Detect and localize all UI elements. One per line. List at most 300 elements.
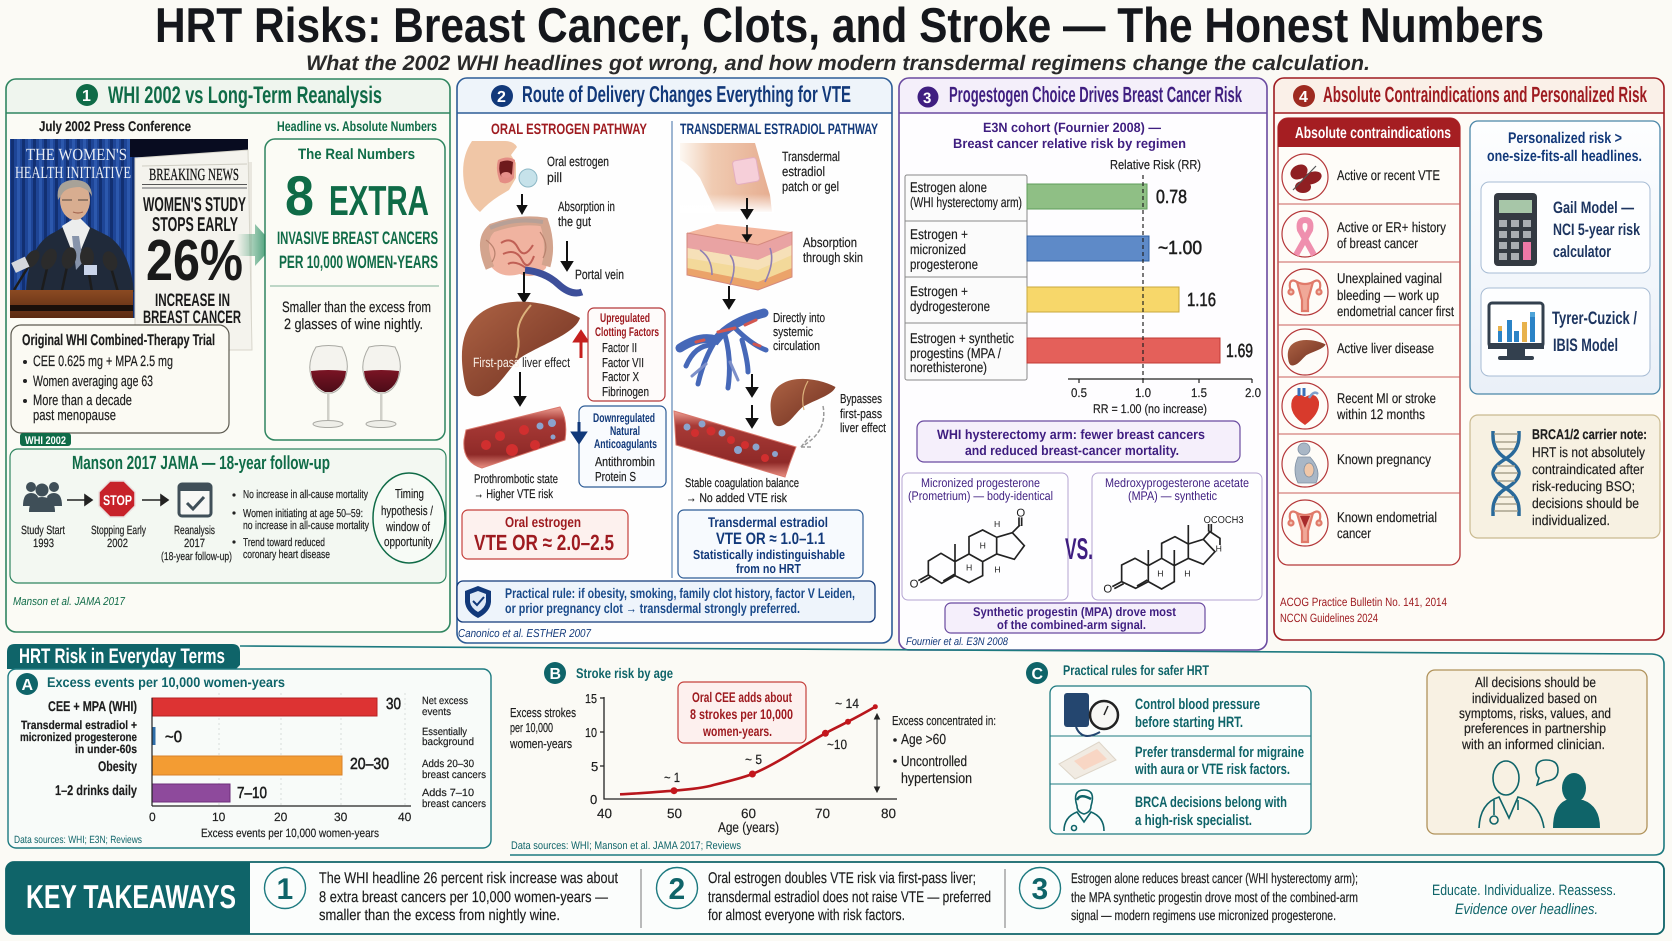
excess concentrated note: Age >60 xyxy=(901,732,946,748)
panel 2: route of delivery: pill xyxy=(547,170,562,185)
panel C heading: C xyxy=(1032,666,1044,683)
Manson 2017 follow-up box: 1993 xyxy=(33,536,54,550)
line chart: 0 xyxy=(590,792,597,807)
line chart: 60 xyxy=(741,806,756,821)
icon: clot xyxy=(1288,161,1323,193)
bar chart: in under-60s xyxy=(75,742,137,756)
icon: open mouth and pill xyxy=(463,141,537,212)
closing message: Evidence over headlines. xyxy=(1455,901,1598,918)
BRCA carrier note: HRT is not absolutely xyxy=(1532,444,1645,460)
panel C: practical rules xyxy=(1026,662,1311,834)
transdermal VTE result box: VTE OR ≈ 1.0–1.1 xyxy=(716,530,825,548)
newspaper headline: BREAST CANCER xyxy=(143,307,241,327)
icon: calendar xyxy=(179,484,211,516)
takeaway 3 xyxy=(1020,868,1358,923)
icon: liver xyxy=(1288,340,1326,365)
newspaper headline xyxy=(135,150,252,350)
upregulated clotting factors box: Clotting Factors xyxy=(595,325,659,339)
relative risk bar chart: 0.78 xyxy=(1156,187,1187,208)
icon: specialist xyxy=(1064,790,1104,831)
molecule: progesterone xyxy=(910,506,1025,590)
arrow xyxy=(743,225,751,241)
Manson 2017 follow-up box: 2017 xyxy=(184,536,205,550)
sources: ACOG, NCCN: ACOG Practice Bulletin No. 141, 2014 xyxy=(1280,595,1447,609)
rules list: BRCA decisions belong with xyxy=(1135,794,1287,811)
relative risk bar chart: RR = 1.00 (no increase) xyxy=(1093,402,1207,416)
molecule: medroxyprogesterone acetate: OCOCH3 xyxy=(1204,514,1244,525)
arrow: headline to absolute numbers xyxy=(237,224,274,266)
panel A heading: A xyxy=(22,677,34,694)
molecule: medroxyprogesterone acetate: H xyxy=(1157,569,1164,579)
icon: blood pressure cuff xyxy=(1064,693,1118,736)
source: Canonico: Canonico et al. ESTHER 2007 xyxy=(458,628,592,640)
icon: systemic veins xyxy=(680,313,766,388)
line chart: Excess strokes xyxy=(510,705,576,720)
personalized risk box xyxy=(1470,121,1660,394)
arrow xyxy=(67,495,92,505)
BRCA carrier note: decisions should be xyxy=(1532,495,1639,511)
headline vs absolute heading: Headline vs. Absolute Numbers xyxy=(277,118,437,134)
oral VTE result box: VTE OR ≈ 2.0–2.5 xyxy=(474,530,614,555)
panel 4: contraindications and personalized risk xyxy=(1274,78,1664,640)
absolute contraindications list: cancer xyxy=(1337,525,1371,541)
molecule: progesterone: H xyxy=(966,563,972,573)
key takeaways banner xyxy=(6,862,1664,934)
bar chart: breast cancers xyxy=(422,769,486,781)
oral VTE result box xyxy=(462,510,628,559)
panel 2: route of delivery: Directly into xyxy=(773,310,825,325)
bar chart: Net excess xyxy=(422,695,468,707)
panel A heading xyxy=(16,673,285,695)
timing hypothesis ellipse: Timing xyxy=(395,486,424,501)
icon: bypassed liver xyxy=(771,379,836,426)
card: Gail model: NCI 5-year risk xyxy=(1553,221,1641,239)
arrow xyxy=(742,198,752,218)
card: MPA molecule: Medroxyprogesterone acetate xyxy=(1105,476,1249,490)
rules list: Control blood pressure xyxy=(1135,696,1260,713)
Manson 2017 follow-up box: Manson 2017 JAMA — 18-year follow-up xyxy=(72,453,330,474)
bar chart: events xyxy=(422,706,451,718)
line chart: 40 xyxy=(597,806,612,821)
card: MPA molecule xyxy=(1092,473,1262,600)
shared decision box: preferences in partnership xyxy=(1464,720,1606,736)
relative risk bar chart: 1.16 xyxy=(1187,290,1216,311)
rules list xyxy=(1050,686,1311,834)
takeaway 2: 2 xyxy=(668,873,685,906)
icon: stop sign: STOP xyxy=(103,492,132,508)
bar chart: Adds 7–10 xyxy=(422,787,474,799)
transdermal VTE result box: Transdermal estradiol xyxy=(708,514,828,530)
source: Fournier: Fournier et al. E3N 2008 xyxy=(906,636,1009,648)
molecule: progesterone: O xyxy=(910,577,918,590)
icon: stable blood vessel xyxy=(674,411,796,477)
Manson 2017 follow-up box: Reanalysis xyxy=(174,523,215,537)
icon: heart xyxy=(1291,388,1319,425)
takeaway 1: 1 xyxy=(276,873,293,906)
Manson 2017 follow-up box xyxy=(10,449,446,583)
shared decision box: with an informed clinician. xyxy=(1461,736,1605,752)
relative risk bar chart: Relative Risk (RR) xyxy=(1110,157,1201,172)
molecule: medroxyprogesterone acetate: H xyxy=(1216,543,1222,553)
Manson 2017 follow-up box: Trend toward reduced xyxy=(243,537,325,549)
relative risk bar chart: dydrogesterone xyxy=(910,298,990,314)
takeaway 2: for almost everyone with risk factors. xyxy=(708,907,905,924)
absolute contraindications list: endometrial cancer first xyxy=(1337,303,1454,319)
icon: uterus xyxy=(1288,280,1322,311)
bar chart: 40 xyxy=(398,810,412,824)
newspaper headline: BREAKING NEWS xyxy=(149,165,239,184)
arrow xyxy=(724,286,734,308)
relative risk bar chart: norethisterone) xyxy=(910,359,987,375)
original WHI trial box: Original WHI Combined-Therapy Trial xyxy=(22,332,215,349)
panel A: excess events chart xyxy=(8,669,491,848)
panel B heading: Stroke risk by age xyxy=(576,665,673,681)
icon: DNA helix xyxy=(1493,431,1519,516)
BRCA carrier note: individualized. xyxy=(1532,512,1610,528)
panel 2: route of delivery: liver effect xyxy=(840,420,886,435)
panel 3: progestogen choice xyxy=(899,78,1267,650)
absolute contraindications list: within 12 months xyxy=(1336,406,1425,422)
arrow: anticoagulants down xyxy=(573,422,585,442)
downregulated anticoagulants box: Protein S xyxy=(595,469,636,484)
line chart xyxy=(509,691,897,835)
line chart: 10 xyxy=(585,725,597,740)
Manson 2017 follow-up box: coronary heart disease xyxy=(243,549,330,561)
original WHI trial box: More than a decade xyxy=(33,392,132,409)
rules list: before starting HRT. xyxy=(1135,714,1243,731)
relative risk bar chart: Estrogen + xyxy=(910,283,968,299)
BRCA carrier note: risk-reducing BSO; xyxy=(1532,478,1635,494)
bar chart: 30 xyxy=(334,810,348,824)
icon: blood vessel with clots xyxy=(464,407,566,468)
panel 2: route of delivery: Bypasses xyxy=(840,391,882,406)
transdermal VTE result box: Statistically indistinguishable xyxy=(693,547,845,562)
section tab xyxy=(7,644,240,669)
absolute contraindications list: Absolute contraindications xyxy=(1295,125,1451,142)
relative risk bar chart xyxy=(905,157,1261,416)
panel 2: route of delivery: the gut xyxy=(558,214,591,229)
original WHI trial box: CEE 0.625 mg + MPA 2.5 mg xyxy=(33,353,173,370)
icon: liver, first-pass effect xyxy=(462,302,580,396)
panel 2: route of delivery: systemic xyxy=(773,324,813,339)
oral CEE callout: Oral CEE adds about xyxy=(692,689,792,705)
takeaway 3: the MPA synthetic progestin drove most of the combined-arm xyxy=(1071,889,1358,905)
card: Tyrer-Cuzick: Tyrer-Cuzick / xyxy=(1552,308,1637,328)
oral pathway heading: ORAL ESTROGEN PATHWAY xyxy=(491,121,647,138)
original WHI trial box: Women averaging age 63 xyxy=(33,373,153,390)
arrow xyxy=(518,194,526,213)
bar chart: Obesity xyxy=(98,758,137,774)
chart heading xyxy=(953,120,1186,151)
downregulated anticoagulants box: Anticoagulants xyxy=(594,437,657,451)
panel 2: route of delivery: through skin xyxy=(803,250,863,265)
downregulated anticoagulants box: Downregulated xyxy=(593,411,655,425)
panel B heading xyxy=(544,662,673,684)
transdermal VTE result box: from no HRT xyxy=(736,561,801,576)
card: Gail model: Gail Model — xyxy=(1553,199,1634,217)
bar chart: 7–10 xyxy=(237,785,267,802)
takeaway 2: Oral estrogen doubles VTE risk via first-pass liver; xyxy=(708,870,976,887)
line chart: ~ 14 xyxy=(835,696,859,711)
panel 2: route of delivery: estradiol xyxy=(782,164,825,179)
bar chart: 1–2 drinks daily xyxy=(55,782,137,798)
card: Gail model: calculator xyxy=(1553,243,1611,261)
line chart: women-years xyxy=(509,736,572,751)
rules list: a high-risk specialist. xyxy=(1135,812,1252,829)
real numbers box: Smaller than the excess from xyxy=(282,299,431,316)
icon: liver, first-pass effect: First-pass liver effect xyxy=(473,355,570,370)
press conference photo xyxy=(10,139,248,318)
shared decision box: individualized based on xyxy=(1472,690,1597,706)
arrow xyxy=(747,405,757,427)
oral CEE callout xyxy=(678,682,806,743)
line chart: ~10 xyxy=(827,737,847,752)
bar chart: 0 xyxy=(149,810,156,824)
shared decision box xyxy=(1427,670,1647,834)
bar chart: 10 xyxy=(212,810,226,824)
panel 1: WHI 2002 vs long-term reanalysis xyxy=(6,79,450,632)
chart heading: Breast cancer relative risk by regimen xyxy=(953,136,1186,151)
molecule: medroxyprogesterone acetate: H xyxy=(1184,569,1191,579)
takeaway 3: 3 xyxy=(1032,873,1048,906)
source: Manson: Manson et al. JAMA 2017 xyxy=(13,596,126,608)
sources: ACOG, NCCN: NCCN Guidelines 2024 xyxy=(1280,611,1378,625)
line chart: 15 xyxy=(585,691,597,706)
relative risk bar chart: micronized xyxy=(910,241,966,257)
card: Tyrer-Cuzick: IBIS Model xyxy=(1553,335,1618,355)
molecule: progesterone: O xyxy=(1016,506,1025,519)
practical rule callout: or prior pregnancy clot → transdermal strongly preferred. xyxy=(505,600,800,616)
BRCA carrier note: contraindicated after xyxy=(1532,461,1644,477)
Manson 2017 follow-up box: Stopping Early xyxy=(91,523,146,537)
Manson 2017 follow-up box: No increase in all-cause mortality xyxy=(243,489,368,501)
panel A heading: Excess events per 10,000 women-years xyxy=(47,674,285,690)
relative risk bar chart: ~1.00 xyxy=(1158,238,1202,259)
card: Gail model xyxy=(1481,182,1650,273)
absolute contraindications list: Active or recent VTE xyxy=(1337,167,1440,183)
panel 2: route of delivery: Absorption in xyxy=(558,199,615,214)
arrow xyxy=(142,495,168,505)
WHI 2002 tag: WHI 2002 xyxy=(25,435,66,447)
panel 1 heading: 1 xyxy=(82,88,91,105)
transdermal VTE result box xyxy=(678,510,863,578)
downregulated anticoagulants box xyxy=(579,406,666,487)
takeaway 3: signal — modern regimens use micronized progesterone. xyxy=(1071,907,1336,923)
panel 2 heading xyxy=(491,81,851,107)
closing message xyxy=(1432,882,1616,918)
BRCA carrier note xyxy=(1470,415,1660,538)
downregulated anticoagulants box: Natural xyxy=(610,424,640,438)
downregulated anticoagulants box: Antithrombin xyxy=(595,454,655,469)
source: Data sources: WHI; Manson et al. JAMA 2017; Reviews xyxy=(511,840,741,852)
panel 2: route of delivery: Portal vein xyxy=(575,267,624,282)
arrow xyxy=(747,374,757,396)
real numbers box: 8 xyxy=(285,164,314,227)
Manson 2017 follow-up box: Women initiating at age 50–59: xyxy=(243,508,363,520)
hysterectomy arm callout: WHI hysterectomy arm: fewer breast cancers xyxy=(937,427,1205,442)
section tab: HRT Risk in Everyday Terms xyxy=(19,645,225,668)
bar chart: 20 xyxy=(274,810,288,824)
absolute contraindications list: Active liver disease xyxy=(1337,340,1434,356)
bar chart xyxy=(20,693,486,840)
icon: shield xyxy=(465,586,491,618)
takeaway 1: The WHI headline 26 percent risk increase was about xyxy=(319,870,619,887)
bar chart: 20–30 xyxy=(350,756,389,773)
Manson 2017 follow-up box: no increase in all-cause mortality xyxy=(243,520,369,532)
panel B heading: B xyxy=(550,666,561,683)
bar chart: Essentially xyxy=(422,726,468,738)
icon: stop sign xyxy=(99,481,135,517)
line chart: 70 xyxy=(815,806,830,821)
panel 2: route of delivery: patch or gel xyxy=(782,179,839,194)
takeaway 1: 8 extra breast cancers per 10,000 women-years — xyxy=(319,889,608,906)
relative risk bar chart: (WHI hysterectomy arm) xyxy=(910,194,1022,210)
bar chart: Excess events per 10,000 women-years xyxy=(201,826,379,840)
oral VTE result box: Oral estrogen xyxy=(505,515,581,531)
absolute contraindications list: Known pregnancy xyxy=(1337,451,1431,467)
relative risk bar chart: progestins (MPA / xyxy=(910,345,1001,361)
press conference photo: HEALTH INITIATIVE xyxy=(15,163,131,182)
absolute contraindications list: Recent MI or stroke xyxy=(1337,390,1436,406)
upregulated clotting factors box: Upregulated xyxy=(600,311,650,325)
real numbers box: INVASIVE BREAST CANCERS xyxy=(277,228,438,248)
shared decision box: symptoms, risks, values, and xyxy=(1459,705,1611,721)
excess concentrated note xyxy=(892,713,996,787)
arrow: dashed bypass xyxy=(801,406,824,447)
shared decision box: All decisions should be xyxy=(1475,674,1596,690)
timing hypothesis ellipse: window of xyxy=(385,519,430,534)
hysterectomy arm callout: and reduced breast-cancer mortality. xyxy=(965,443,1179,458)
upregulated clotting factors box: Factor X xyxy=(602,369,639,384)
panel 2: route of delivery: Oral estrogen xyxy=(547,154,609,169)
icon: uterus with cancer xyxy=(1288,512,1322,542)
real numbers box xyxy=(265,139,445,440)
card: micronized progesterone molecule: Micronized progesterone xyxy=(921,476,1040,490)
panel 2 heading: 2 xyxy=(497,89,506,106)
bar chart: ~0 xyxy=(165,729,182,746)
icon: clinician and patient xyxy=(1479,760,1600,828)
panel 1 heading xyxy=(76,82,382,109)
panel 2: route of delivery: Stable coagulation balance xyxy=(685,476,799,490)
absolute contraindications list: Active or ER+ history xyxy=(1337,219,1446,235)
relative risk bar chart: progesterone xyxy=(910,256,978,272)
line chart: Age (years) xyxy=(718,819,779,835)
upregulated clotting factors box: Factor VII xyxy=(602,355,644,370)
synthetic progestin callout: of the combined-arm signal. xyxy=(997,618,1146,632)
line chart: 5 xyxy=(591,759,598,774)
original WHI trial box: past menopause xyxy=(33,407,116,424)
icon: calculator xyxy=(1494,193,1537,266)
takeaways heading: KEY TAKEAWAYS xyxy=(26,878,236,915)
panel 2: route of delivery: Absorption xyxy=(803,235,857,250)
icon: intestines and portal vein xyxy=(484,220,582,293)
bar chart: breast cancers xyxy=(422,798,486,810)
excess concentrated note: Excess concentrated in: xyxy=(892,713,996,728)
card: MPA molecule: (MPA) — synthetic xyxy=(1128,489,1217,503)
line chart: 80 xyxy=(881,806,896,821)
arrow: clotting factors up xyxy=(575,332,587,358)
card: micronized progesterone molecule xyxy=(902,473,1068,600)
panel 3 heading: 3 xyxy=(923,90,931,107)
timing hypothesis ellipse xyxy=(373,473,445,563)
hysterectomy arm callout xyxy=(917,421,1240,462)
newspaper headline: WOMEN'S STUDY xyxy=(143,194,246,216)
relative risk bar chart: 2.0 xyxy=(1245,386,1261,400)
relative risk bar chart: 1.0 xyxy=(1135,386,1151,400)
icon: arm with patch xyxy=(680,143,774,213)
relative risk bar chart: Estrogen alone xyxy=(910,179,987,195)
upregulated clotting factors box: Factor II xyxy=(602,340,637,355)
absolute contraindications list: Unexplained vaginal xyxy=(1337,270,1442,286)
icon: skin block xyxy=(687,224,792,290)
closing message: Educate. Individualize. Reassess. xyxy=(1432,882,1616,899)
panel 3 heading: Progestogen Choice Drives Breast Cancer Risk xyxy=(949,82,1242,107)
synthetic progestin callout xyxy=(945,603,1205,633)
relative risk bar chart: 1.5 xyxy=(1191,386,1207,400)
takeaway 2 xyxy=(656,868,991,924)
bar chart: CEE + MPA (WHI) xyxy=(48,698,137,714)
newspaper headline: INCREASE IN xyxy=(155,290,230,310)
bar chart: background xyxy=(422,736,474,748)
relative risk bar chart: 1.69 xyxy=(1226,341,1253,362)
oral CEE callout: women-years. xyxy=(702,723,772,739)
molecule: progesterone: H xyxy=(994,519,1000,529)
panel 1 heading: WHI 2002 vs Long-Term Reanalysis xyxy=(108,82,382,109)
panel 2 heading: Route of Delivery Changes Everything for VTE xyxy=(522,81,851,107)
icon: pregnancy xyxy=(1295,443,1318,483)
icon: pink ribbon xyxy=(1296,220,1314,255)
timing hypothesis ellipse: hypothesis / xyxy=(381,503,433,518)
panel 2: route of delivery xyxy=(457,78,892,643)
timing hypothesis ellipse: opportunity xyxy=(384,534,433,549)
card: micronized progesterone molecule: (Prometrium) — body-identical xyxy=(908,489,1053,503)
original WHI trial box xyxy=(11,325,229,433)
rules list: Prefer transdermal for migraine xyxy=(1135,744,1304,761)
transdermal pathway heading: TRANSDERMAL ESTRADIOL PATHWAY xyxy=(680,121,878,138)
panel 3 heading xyxy=(918,82,1242,108)
relative risk bar chart: Estrogen + synthetic xyxy=(910,330,1014,346)
upregulated clotting factors box xyxy=(588,308,665,401)
press conference heading: July 2002 Press Conference xyxy=(39,118,191,134)
relative risk bar chart: Estrogen + xyxy=(910,226,968,242)
newspaper headline: 26% xyxy=(146,228,243,293)
rules list: with aura or VTE risk factors. xyxy=(1134,761,1290,778)
panel 2: route of delivery: → Higher VTE risk xyxy=(474,487,554,501)
real numbers box: PER 10,000 WOMEN-YEARS xyxy=(279,252,438,272)
panel 2: route of delivery: Prothrombotic state xyxy=(474,472,558,486)
excess concentrated note: Uncontrolled xyxy=(901,754,967,770)
subtitle: What the 2002 WHI headlines got wrong, and how modern transdermal regimens change the calculation. xyxy=(306,52,1370,75)
relative risk bar chart: 0.5 xyxy=(1071,386,1087,400)
absolute contraindications list: of breast cancer xyxy=(1337,235,1418,251)
absolute contraindications list: bleeding — work up xyxy=(1337,287,1439,303)
takeaway 1 xyxy=(264,868,619,924)
real numbers box: 2 glasses of wine nightly. xyxy=(284,316,423,333)
practical rule callout xyxy=(457,581,875,622)
icon: patch xyxy=(1059,742,1116,779)
line chart: 50 xyxy=(667,806,682,821)
arrow xyxy=(562,241,572,270)
real numbers box: EXTRA xyxy=(329,177,429,224)
bar chart: Transdermal estradiol + xyxy=(21,718,137,732)
bar chart: 30 xyxy=(386,696,401,713)
line chart: ~ 1 xyxy=(664,770,680,785)
synthetic progestin callout: Synthetic progestin (MPA) drove most xyxy=(973,605,1177,619)
panel C heading: Practical rules for safer HRT xyxy=(1063,662,1209,678)
panel C heading xyxy=(1026,662,1209,684)
real numbers box: The Real Numbers xyxy=(298,146,415,163)
bar chart: micronized progesterone xyxy=(20,730,137,744)
